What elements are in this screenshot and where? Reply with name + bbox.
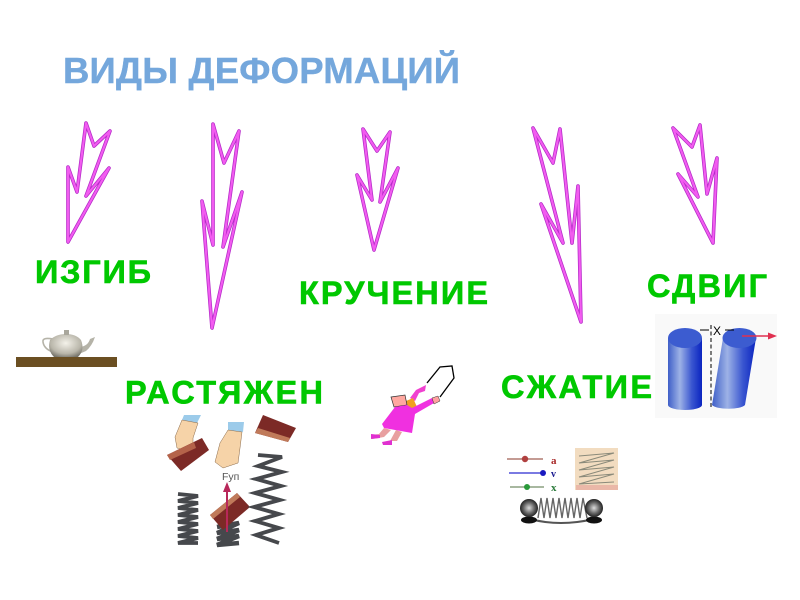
center book (210, 493, 250, 530)
arrow: to torsion (357, 129, 398, 250)
label: tension: РАСТЯЖЕН (125, 374, 323, 410)
left cylinder (668, 328, 702, 410)
arrow: to compression (533, 128, 581, 322)
icon: shear cylinders (655, 314, 777, 418)
displacement label: X (713, 324, 721, 338)
center hand (215, 422, 244, 468)
force label: Fуп (222, 471, 239, 483)
stretched right spring (254, 455, 282, 543)
graph row a: a (551, 455, 557, 467)
arrow: to bending (68, 123, 110, 242)
label: shear: СДВИГ (647, 268, 767, 304)
label: bending: ИЗГИБ (35, 254, 151, 290)
graph row v: v (551, 469, 556, 480)
graph row x: x (551, 482, 557, 494)
title: ВИДЫ ДЕФОРМАЦИЙ (63, 49, 460, 91)
spring between two balls (520, 498, 603, 524)
arrow: to tension (202, 124, 242, 328)
compressed left spring (178, 494, 198, 543)
top right book (255, 415, 296, 442)
compressed center spring (217, 523, 239, 545)
label: torsion: КРУЧЕНИЕ (299, 275, 488, 311)
displacement ticks (700, 329, 734, 331)
arrow: to shear (673, 125, 717, 243)
label: compression: СЖАТИЕ (501, 369, 652, 405)
force arrow (223, 482, 231, 532)
icon: tension springs and hands (167, 415, 296, 545)
icon: compression charts and spring (507, 448, 618, 524)
dashed guide (710, 325, 712, 407)
sheared cylinder (712, 328, 756, 409)
zigzag chart (575, 448, 618, 490)
force arrow (742, 332, 777, 340)
icon: teapot on shelf (16, 330, 117, 367)
left hand with book (167, 415, 209, 471)
icon: girl with skipping rope (371, 366, 454, 445)
